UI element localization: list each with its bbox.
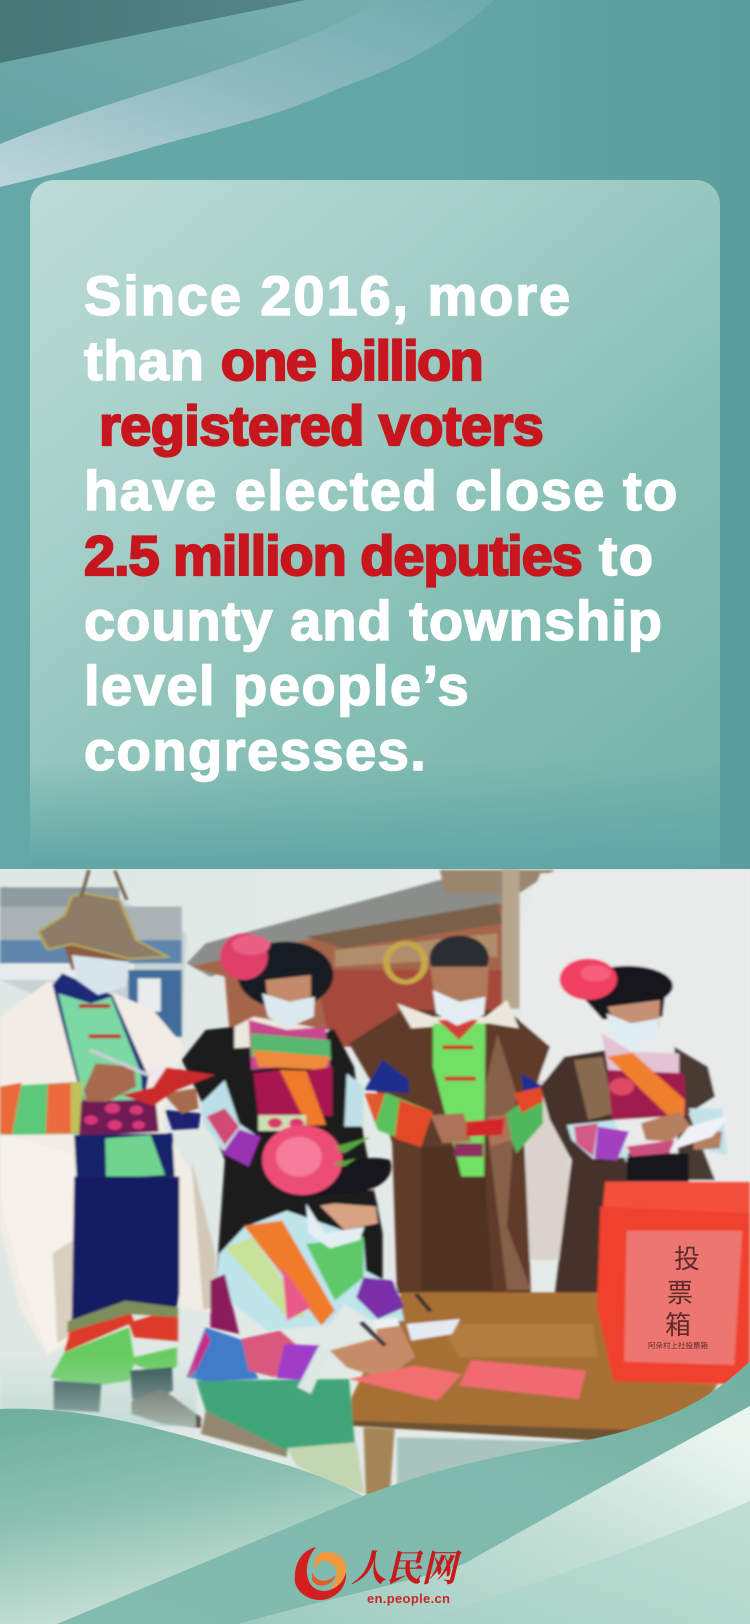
logo: People's Daily Online <box>295 1547 463 1606</box>
ballot box label <box>648 1244 708 1350</box>
top swoosh: light band <box>0 0 494 187</box>
person 5: seated woman writing <box>187 1211 586 1494</box>
left building <box>0 887 187 1037</box>
ballot box label: 阿朵村上社投票箱 <box>648 1340 708 1350</box>
photo bottom fade <box>0 1353 196 1427</box>
ballot box label: 箱 <box>665 1310 691 1340</box>
headline text block: than one billion <box>84 329 482 392</box>
top swoosh: medium band <box>0 0 383 144</box>
bottom wave: left <box>0 1409 363 1624</box>
headline text block: congresses. <box>84 719 427 782</box>
white wall <box>521 869 750 1260</box>
logo url: en.people.cn <box>367 1591 450 1606</box>
logo emblem <box>295 1547 346 1600</box>
ballot box label: 投 <box>674 1244 700 1274</box>
headline text block: have elected close to <box>84 459 679 522</box>
person 1 lower: skirt and boots <box>50 1301 201 1428</box>
headline text block: registered voters <box>99 394 543 457</box>
bottom wave: light band <box>239 1406 750 1624</box>
logo wordmark: 人民网 <box>351 1549 463 1590</box>
headline text block: county and township <box>84 589 663 652</box>
text panel <box>30 180 720 868</box>
top swoosh: dark band <box>0 0 306 63</box>
bottom wave: middle <box>57 1361 750 1624</box>
headline text block <box>84 264 679 782</box>
headline text block: 2.5 million deputies to <box>84 524 655 587</box>
ballot box <box>597 1182 750 1385</box>
photo: villagers voting <box>0 869 750 1624</box>
ballot box label: 票 <box>667 1278 693 1308</box>
person 4: woman at right <box>540 959 729 1293</box>
person 5 head and peony <box>262 1125 391 1248</box>
person 2: woman with black fur <box>182 933 383 1293</box>
person 1: man in white fur and hat <box>0 870 216 1357</box>
house roof and brick wall <box>187 869 555 1047</box>
bottom wave: lower right <box>407 1501 750 1624</box>
headline text block: Since 2016, more <box>84 264 572 327</box>
headline text block: level people’s <box>84 654 470 717</box>
person 3: man in brown fur <box>349 936 550 1293</box>
ballot table <box>347 1292 717 1496</box>
